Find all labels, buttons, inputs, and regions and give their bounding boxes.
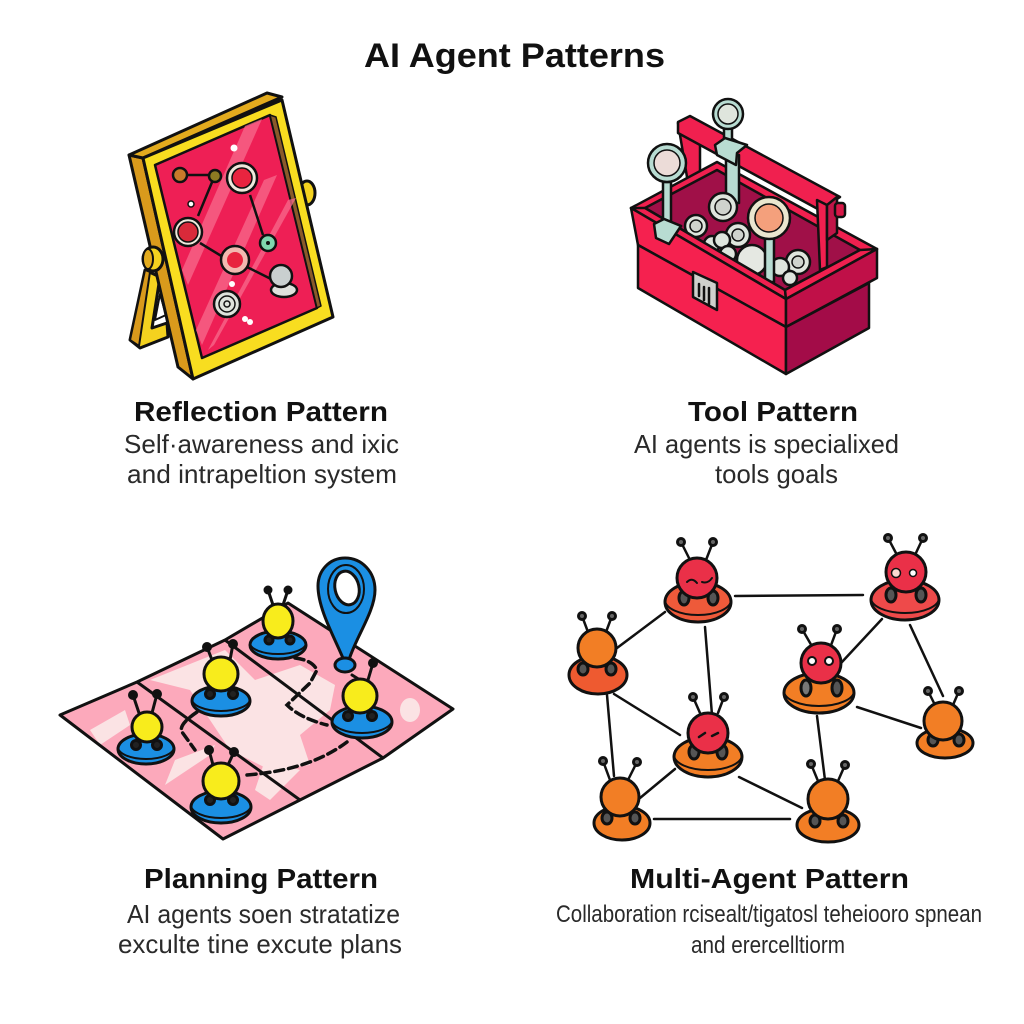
heading: Tool Pattern bbox=[688, 396, 858, 427]
heading: Reflection Pattern bbox=[134, 396, 388, 427]
tools: magnifier gauges bbox=[648, 99, 810, 285]
box faces bbox=[631, 208, 786, 327]
toolbox back handle post bbox=[678, 118, 700, 183]
description: AI agents is specialixed bbox=[634, 429, 899, 459]
agent: left bbox=[118, 690, 174, 764]
agent: orange, right bbox=[917, 688, 973, 758]
icon: mirror frame with node network bbox=[129, 93, 333, 379]
description bbox=[634, 429, 899, 489]
agent: orange, left bbox=[569, 612, 627, 694]
heading: Planning Pattern bbox=[144, 863, 378, 894]
agent: orange, bottom left bbox=[594, 758, 650, 840]
description: tools goals bbox=[715, 459, 838, 489]
description bbox=[118, 899, 402, 959]
panel: planning pattern bbox=[60, 558, 453, 959]
agent: right bbox=[332, 660, 392, 738]
description: AI agents soen stratatize bbox=[127, 899, 400, 929]
clip on rim bbox=[654, 219, 681, 244]
mirror reflections bbox=[182, 119, 296, 350]
description: and erercelltiorm bbox=[691, 932, 845, 959]
handle bar bbox=[678, 116, 840, 214]
description bbox=[556, 901, 982, 959]
description: Self·awareness and ixic bbox=[124, 429, 399, 459]
panel: multi-agent pattern bbox=[556, 534, 982, 959]
heading: Multi-Agent Pattern bbox=[630, 863, 909, 894]
agent: red, top centre bbox=[665, 538, 731, 622]
agent: top bbox=[250, 587, 306, 659]
agent: red, centre right bbox=[784, 626, 854, 713]
icon: toolbox bbox=[631, 99, 877, 374]
latch bbox=[693, 272, 717, 310]
agent: red, centre bbox=[674, 694, 742, 777]
agent: orange, bottom right bbox=[797, 760, 859, 842]
agent: bottom bbox=[191, 746, 251, 823]
agent: upper-middle bbox=[192, 640, 250, 716]
toolbox rim and interior bbox=[631, 162, 877, 299]
front rim bbox=[631, 208, 786, 299]
panel: tool pattern bbox=[631, 99, 899, 489]
dashed route bbox=[181, 658, 347, 775]
description: and intrapeltion system bbox=[127, 459, 397, 489]
title: AI Agent Patterns bbox=[364, 37, 665, 75]
agent: red, top right bbox=[871, 534, 939, 620]
panel: reflection pattern bbox=[124, 93, 399, 489]
node network bbox=[173, 144, 297, 325]
icon: folded map bbox=[60, 603, 453, 839]
connection lines bbox=[607, 595, 943, 819]
icon: location pin bbox=[318, 558, 375, 672]
description: exculte tine excute plans bbox=[118, 929, 402, 959]
description bbox=[124, 429, 399, 489]
